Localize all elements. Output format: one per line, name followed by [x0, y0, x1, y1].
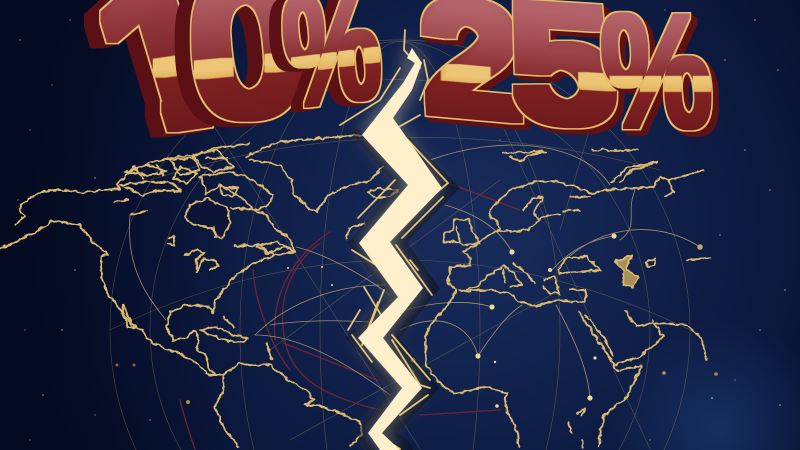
lightning crack: central bolt: [358, 32, 442, 450]
Baltic: [500, 196, 579, 232]
Alaska and Arctic coast: [15, 143, 250, 225]
Scotland fragment: [347, 224, 363, 238]
Svalbard and Arctic islands: [503, 150, 638, 162]
Aral Sea and Balkhash: [647, 258, 710, 267]
West coast of the Americas: [0, 222, 238, 447]
Caspian Sea: [615, 255, 638, 287]
map: Europe, Africa and Middle East coastlines: [425, 150, 710, 447]
South America north coast: [223, 363, 362, 447]
Hudson Bay: [185, 198, 231, 238]
Arabia and Persian Gulf: [613, 310, 707, 371]
map: Americas and Greenland coastlines: [0, 135, 398, 447]
islands near Alaska: [114, 199, 147, 215]
map nodes: glowing city dots: [116, 233, 718, 408]
network arcs: globe and trade routes: [110, 40, 700, 450]
Western Europe: [448, 230, 500, 290]
Madagascar and small islands: [568, 408, 585, 447]
Black Sea: [558, 257, 600, 273]
Great Lakes: [168, 237, 218, 272]
Caribbean islands: [200, 317, 272, 360]
Scandinavia and northern Russia: [490, 162, 703, 230]
East coast of North America and Gulf of Mexico: [167, 207, 295, 375]
headline: 10%: [84, 0, 382, 138]
St Lawrence: [235, 242, 295, 254]
headline: 25%: [414, 0, 716, 162]
lightning crack: dark fracture edges and gold sparks: [340, 30, 450, 449]
Greenland: [247, 135, 383, 212]
Red Sea: [578, 312, 613, 363]
North and West Africa coast: [425, 290, 518, 447]
East Africa: [598, 367, 642, 447]
Iceland: [368, 188, 398, 198]
Arctic islands: [120, 150, 273, 210]
Mediterranean north shore, Italy, Greece: [460, 263, 560, 293]
Baja California: [122, 305, 135, 329]
Mediterranean south shore: [460, 290, 587, 307]
Britain and Ireland: [443, 219, 480, 245]
